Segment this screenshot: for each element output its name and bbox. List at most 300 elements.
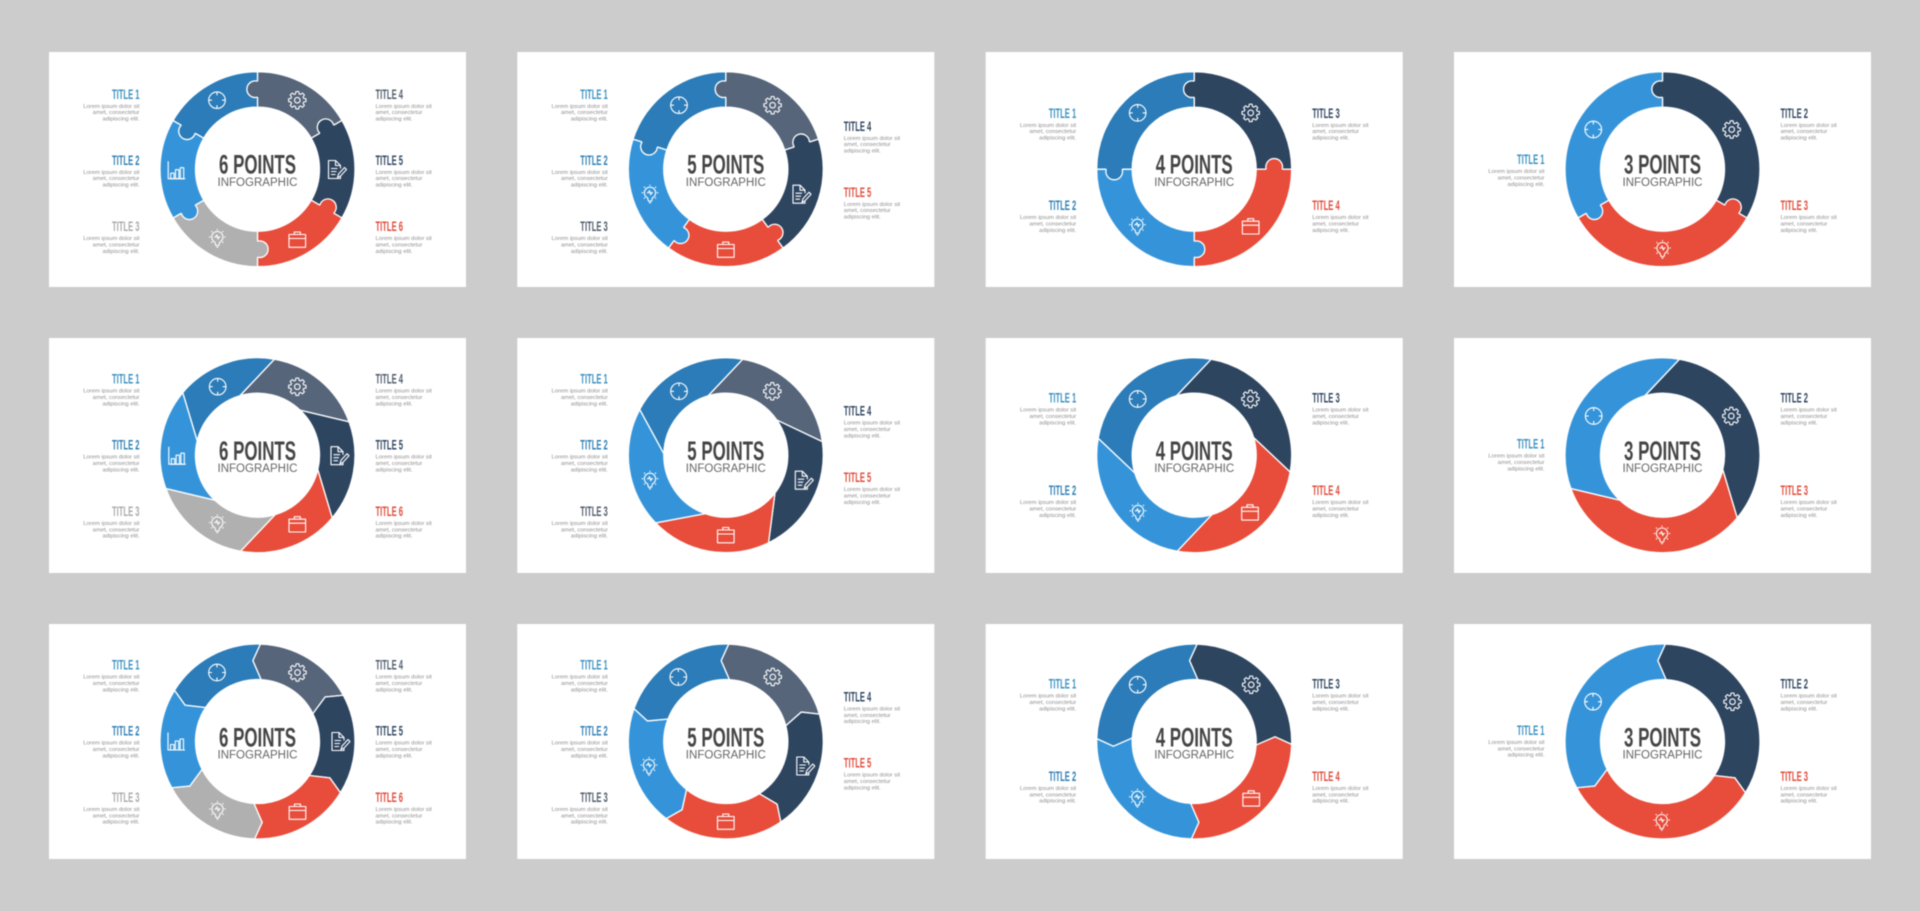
- icon: gear: [1723, 121, 1740, 138]
- label: title 5: adipiscing elit.: [844, 214, 881, 220]
- label: title 1: TITLE 1: [580, 372, 608, 387]
- label: title 5: Lorem ipsum dolor sit: [844, 487, 900, 493]
- panel background: [1454, 624, 1871, 859]
- label: title 4: adipiscing elit.: [1312, 228, 1350, 234]
- label: title 4: Lorem ipsum dolor sit: [844, 136, 900, 142]
- icon: crosshair: [671, 383, 687, 400]
- center subheading: INFOGRAPHIC: [1154, 177, 1234, 189]
- label: title 1: adipiscing elit.: [571, 116, 608, 122]
- label: title 6: Lorem ipsum dolor sit: [376, 807, 432, 813]
- panel: 6 points slanted: [49, 328, 466, 583]
- label: title 3: Lorem ipsum dolor sit: [551, 236, 608, 242]
- segment: title 5: [744, 139, 847, 251]
- label: title 2: Lorem ipsum dolor sit: [1780, 123, 1837, 129]
- label: title 3: TITLE 3: [1312, 677, 1340, 692]
- segment: title 5: [278, 392, 386, 518]
- panel: 4 points chevron: [986, 624, 1403, 859]
- puzzle tab: title 1: [176, 124, 196, 143]
- segment: title 4: [726, 72, 819, 150]
- icon: crosshair: [1129, 105, 1146, 121]
- center subheading: INFOGRAPHIC: [1622, 463, 1702, 475]
- label: title 2: TITLE 2: [580, 438, 608, 453]
- label: title 5: adipiscing elit.: [376, 182, 413, 188]
- label: title 6: amet, consectetur: [376, 242, 422, 248]
- panel: 6 points puzzle: [49, 47, 466, 291]
- label: title 1: Lorem ipsum dolor sit: [1020, 408, 1077, 414]
- label: title 5: Lorem ipsum dolor sit: [844, 773, 900, 779]
- segment: title 1: [632, 622, 740, 741]
- puzzle tab: dark blue: [1106, 168, 1122, 180]
- center subheading: INFOGRAPHIC: [686, 177, 766, 189]
- icon: briefcase: [718, 242, 734, 257]
- label: title 2: amet, consectetur: [1029, 507, 1076, 513]
- label: title 3: Lorem ipsum dolor sit: [1312, 408, 1369, 414]
- label: title 3: adipiscing elit.: [1780, 228, 1818, 234]
- segment: title 1: [173, 47, 273, 154]
- icon: briefcase: [718, 814, 734, 829]
- label: title 2: [83, 153, 140, 188]
- label: title 2: TITLE 2: [112, 153, 140, 168]
- center subheading: INFOGRAPHIC: [1622, 750, 1702, 762]
- label: title 1: Lorem ipsum dolor sit: [83, 675, 140, 681]
- panel background: [986, 52, 1403, 287]
- label: title 2: [1780, 677, 1837, 712]
- label: title 1: Lorem ipsum dolor sit: [551, 104, 608, 110]
- segment: red: [659, 751, 787, 875]
- label: title 2: adipiscing elit.: [571, 753, 608, 759]
- label: title 4: Lorem ipsum dolor sit: [1312, 215, 1369, 221]
- icon: document: [328, 160, 346, 178]
- segment: title 6: [242, 185, 342, 291]
- label: title 2: TITLE 2: [1780, 391, 1808, 406]
- segment: title 2: [593, 130, 715, 248]
- center heading: 6 POINTS: [219, 722, 296, 752]
- label: title 1: amet, consectetur: [93, 395, 140, 401]
- label: title 1: [551, 658, 608, 693]
- label: title 2: adipiscing elit.: [1780, 420, 1818, 426]
- icon: light bulb: [641, 757, 657, 775]
- label: title 3: [551, 219, 608, 255]
- label: title 1: adipiscing elit.: [1039, 706, 1077, 712]
- label: title 2: Lorem ipsum dolor sit: [1780, 694, 1837, 700]
- center subheading: INFOGRAPHIC: [218, 463, 298, 475]
- label: title 2: TITLE 2: [1049, 198, 1076, 213]
- segment: title 2: [1658, 644, 1760, 793]
- label: title 1: [1488, 152, 1545, 188]
- label: title 1: [83, 658, 140, 693]
- label: title 3: adipiscing elit.: [571, 249, 608, 255]
- label: title 5: Lorem ipsum dolor sit: [376, 741, 432, 747]
- label: title 3: Lorem ipsum dolor sit: [551, 807, 608, 813]
- label: title 1: adipiscing elit.: [102, 116, 140, 122]
- center heading: 4 POINTS: [1156, 722, 1233, 752]
- puzzle tab: light blue: [673, 227, 692, 247]
- label: title 3: amet, consectetur: [93, 242, 140, 248]
- label: title 2: Lorem ipsum dolor sit: [83, 170, 140, 176]
- label: title 1: Lorem ipsum dolor sit: [1020, 694, 1077, 700]
- label: title 1: TITLE 1: [1517, 723, 1545, 738]
- panel: 3 points slanted: [1454, 338, 1871, 588]
- icon: crosshair: [671, 97, 687, 114]
- segmented slanted ring: [591, 334, 847, 590]
- label: title 3: amet, consectetur: [561, 527, 608, 533]
- segment: title 1: [1529, 60, 1705, 218]
- panel: 5 points chevron: [517, 622, 934, 875]
- label: title 3: Lorem ipsum dolor sit: [83, 236, 140, 242]
- label: title 6: amet, consectetur: [376, 813, 422, 819]
- segmented chevron ring: [593, 622, 847, 875]
- icon: light bulb: [209, 514, 226, 533]
- label: title 4: Lorem ipsum dolor sit: [844, 421, 900, 427]
- label: title 5: TITLE 5: [376, 438, 403, 453]
- label: title 4: [376, 372, 432, 407]
- label: title 2: [1780, 106, 1837, 142]
- label: title 3: TITLE 3: [112, 790, 140, 805]
- label: title 3: Lorem ipsum dolor sit: [1312, 123, 1369, 129]
- label: title 5: TITLE 5: [844, 756, 872, 771]
- label: title 5: TITLE 5: [844, 470, 872, 485]
- segment: title 4: [721, 644, 819, 726]
- label: title 5: amet, consectetur: [844, 208, 891, 214]
- puzzle tab: red: [1266, 159, 1282, 170]
- segmented chevron ring: [1529, 631, 1760, 875]
- label: title 3: Lorem ipsum dolor sit: [1780, 215, 1837, 221]
- label: title 1: [1020, 106, 1077, 142]
- puzzle tab: light blue: [1586, 204, 1606, 223]
- label: title 4: TITLE 4: [1312, 769, 1340, 784]
- label: title 3: [1312, 391, 1369, 426]
- segmented puzzle ring: [131, 47, 384, 291]
- label: title 3: [83, 219, 140, 255]
- icon: light bulb: [1130, 503, 1146, 521]
- label: title 1: amet, consectetur: [1029, 414, 1076, 420]
- label: title 6: TITLE 6: [376, 504, 403, 519]
- label: title 1: [1020, 677, 1077, 712]
- segment: title 1: [1097, 644, 1198, 746]
- center subheading: INFOGRAPHIC: [1154, 463, 1234, 475]
- puzzle tab: title 4: [247, 81, 258, 98]
- label: title 6: adipiscing elit.: [376, 249, 413, 255]
- segmented puzzle ring: [1097, 72, 1292, 267]
- icon: gear: [289, 378, 306, 395]
- label: title 3: amet, consectetur: [93, 813, 140, 819]
- segment: title 3: [1190, 644, 1292, 745]
- icon: crosshair: [209, 664, 225, 681]
- icon: briefcase: [289, 517, 306, 532]
- label: title 4: Lorem ipsum dolor sit: [1312, 786, 1369, 792]
- center subheading: INFOGRAPHIC: [1622, 177, 1702, 189]
- label: title 4: amet, consectetur: [844, 142, 891, 148]
- icon: briefcase: [289, 232, 306, 247]
- label: title 5: [844, 185, 900, 220]
- segment: red: [662, 185, 783, 303]
- label: title 4: adipiscing elit.: [844, 148, 881, 154]
- panel: 3 points chevron: [1454, 624, 1871, 875]
- puzzle tab: title 5: [314, 116, 334, 134]
- icon: gear: [764, 383, 781, 400]
- label: title 2: Lorem ipsum dolor sit: [551, 455, 608, 461]
- label: title 3: TITLE 3: [580, 504, 608, 519]
- segment: title 1: [1097, 72, 1194, 169]
- label: title 4: adipiscing elit.: [1312, 513, 1350, 519]
- label: title 1: amet, consectetur: [1498, 746, 1545, 752]
- segmented puzzle ring: [593, 51, 847, 303]
- label: title 2: TITLE 2: [580, 724, 608, 739]
- label: title 3: TITLE 3: [112, 504, 140, 519]
- icon: gear: [1724, 693, 1741, 710]
- label: title 3: Lorem ipsum dolor sit: [1780, 786, 1837, 792]
- panel: 3 points puzzle: [1454, 52, 1871, 302]
- label: title 2: adipiscing elit.: [1039, 228, 1077, 234]
- label: title 5: adipiscing elit.: [844, 785, 881, 791]
- label: title 2: adipiscing elit.: [571, 182, 608, 188]
- label: title 2: TITLE 2: [1780, 106, 1808, 121]
- label: title 5: Lorem ipsum dolor sit: [376, 455, 432, 461]
- label: title 5: Lorem ipsum dolor sit: [844, 202, 900, 208]
- label: title 2: [1020, 769, 1077, 805]
- segment: title 5: [733, 409, 847, 543]
- icon: briefcase: [1242, 219, 1259, 234]
- label: title 3: TITLE 3: [1780, 769, 1808, 784]
- label: title 1: [551, 372, 608, 407]
- icon: briefcase: [718, 528, 734, 543]
- label: title 5: [844, 470, 900, 506]
- label: title 4: [376, 87, 432, 122]
- label: title 4: [1312, 198, 1369, 234]
- segment: title 3: [1572, 145, 1747, 302]
- label: title 4: Lorem ipsum dolor sit: [1312, 500, 1369, 506]
- segment: title 2: [1097, 738, 1199, 839]
- puzzle tab: navy: [1184, 81, 1195, 98]
- puzzle tab: slate: [715, 81, 727, 98]
- icon: crosshair: [209, 378, 226, 395]
- label: title 1: Lorem ipsum dolor sit: [1488, 740, 1545, 746]
- icon: light bulb: [1653, 812, 1670, 830]
- label: title 1: [1488, 437, 1545, 472]
- panel background: [517, 52, 934, 287]
- label: title 5: adipiscing elit.: [376, 753, 413, 759]
- label: title 1: Lorem ipsum dolor sit: [551, 675, 608, 681]
- center heading: 3 POINTS: [1624, 722, 1701, 752]
- center heading: 4 POINTS: [1156, 150, 1233, 180]
- icon: light bulb: [1654, 526, 1670, 544]
- label: title 2: Lorem ipsum dolor sit: [1020, 500, 1077, 506]
- label: title 4: Lorem ipsum dolor sit: [376, 389, 432, 395]
- segment: title 2: [129, 393, 237, 518]
- segment: title 1: [1098, 358, 1211, 473]
- label: title 4: amet, consectetur: [376, 110, 422, 116]
- label: title 1: [1488, 723, 1545, 759]
- label: title 3: amet, consectetur: [1312, 129, 1359, 135]
- segmented slanted ring: [129, 328, 386, 583]
- label: title 1: TITLE 1: [1517, 152, 1545, 167]
- label: title 4: adipiscing elit.: [376, 401, 413, 407]
- icon: crosshair: [209, 92, 225, 108]
- label: title 6: Lorem ipsum dolor sit: [376, 521, 432, 527]
- center subheading: INFOGRAPHIC: [686, 463, 766, 475]
- icon: gear: [289, 92, 306, 109]
- segment: title 5: [284, 120, 384, 227]
- label: title 5: amet, consectetur: [844, 494, 891, 500]
- puzzle tab: red: [1724, 196, 1744, 214]
- panel: 4 points slanted: [986, 338, 1403, 573]
- icon: gear: [289, 664, 306, 681]
- panel background: [1454, 52, 1871, 287]
- label: title 2: adipiscing elit.: [1039, 513, 1077, 519]
- label: title 3: amet, consectetur: [93, 527, 140, 533]
- label: title 3: Lorem ipsum dolor sit: [1780, 500, 1837, 506]
- label: title 4: TITLE 4: [844, 404, 872, 419]
- icon: light bulb: [209, 229, 226, 247]
- label: title 4: TITLE 4: [1312, 483, 1340, 498]
- segmented slanted ring: [1097, 358, 1292, 553]
- label: title 1: adipiscing elit.: [1507, 753, 1545, 759]
- label: title 3: TITLE 3: [1312, 106, 1340, 121]
- icon: document: [793, 185, 811, 203]
- label: title 5: [844, 756, 900, 791]
- label: title 2: amet, consectetur: [561, 176, 608, 182]
- label: title 1: [83, 372, 140, 407]
- label: title 3: adipiscing elit.: [571, 534, 608, 540]
- label: title 4: adipiscing elit.: [1312, 799, 1350, 805]
- center subheading: INFOGRAPHIC: [218, 177, 298, 189]
- label: title 4: TITLE 4: [376, 372, 403, 387]
- label: title 4: Lorem ipsum dolor sit: [376, 675, 432, 681]
- label: title 2: adipiscing elit.: [102, 753, 140, 759]
- label: title 4: [844, 690, 900, 725]
- panel: 6 points chevron: [49, 618, 466, 865]
- center heading: 5 POINTS: [687, 150, 764, 180]
- segment: title 6: [241, 457, 349, 583]
- label: title 3: adipiscing elit.: [571, 820, 608, 826]
- label: title 5: TITLE 5: [844, 185, 872, 200]
- center heading: 5 POINTS: [687, 436, 764, 466]
- label: title 3: adipiscing elit.: [1780, 513, 1818, 519]
- puzzle tab: navy: [1652, 81, 1664, 98]
- label: title 3: [1780, 198, 1837, 234]
- label: title 1: TITLE 1: [580, 658, 608, 673]
- label: title 1: amet, consectetur: [93, 681, 140, 687]
- puzzle tab: red: [767, 221, 786, 241]
- label: title 4: TITLE 4: [844, 690, 872, 704]
- label: title 6: adipiscing elit.: [376, 820, 413, 826]
- label: title 2: Lorem ipsum dolor sit: [551, 170, 608, 176]
- icon: crosshair: [1585, 693, 1601, 710]
- label: title 2: TITLE 2: [580, 153, 608, 168]
- puzzle tab: light blue: [1193, 241, 1205, 258]
- icon: bar chart: [169, 447, 186, 464]
- icon: light bulb: [1129, 217, 1146, 235]
- icon: gear: [764, 97, 781, 114]
- label: title 3: [1780, 483, 1837, 519]
- label: title 1: TITLE 1: [580, 87, 608, 102]
- segment: title 1: [171, 618, 276, 732]
- segment: title 1: [1531, 339, 1726, 518]
- label: title 5: [376, 724, 432, 759]
- label: title 3: amet, consectetur: [1780, 221, 1827, 227]
- icon: gear: [1243, 676, 1260, 693]
- label: title 3: [83, 504, 140, 540]
- icon: briefcase: [1243, 791, 1260, 806]
- label: title 1: [551, 87, 608, 122]
- label: title 2: [551, 438, 608, 473]
- label: title 4: [1312, 483, 1369, 519]
- label: title 3: Lorem ipsum dolor sit: [1312, 694, 1369, 700]
- label: title 4: adipiscing elit.: [844, 433, 881, 439]
- label: title 4: [376, 658, 432, 693]
- label: title 6: TITLE 6: [376, 219, 403, 234]
- segment: title 1: [1529, 631, 1709, 794]
- label: title 2: [1020, 198, 1077, 234]
- panel background: [49, 338, 466, 573]
- label: title 6: [376, 790, 432, 826]
- label: title 6: [376, 219, 432, 255]
- puzzle tab: title 6: [319, 196, 339, 214]
- puzzle tab: dark blue: [639, 141, 658, 157]
- label: title 4: TITLE 4: [1312, 198, 1340, 213]
- icon: bar chart: [168, 732, 185, 750]
- label: title 5: Lorem ipsum dolor sit: [376, 170, 432, 176]
- label: title 1: amet, consectetur: [1029, 129, 1076, 135]
- label: title 2: amet, consectetur: [561, 747, 608, 753]
- icon: crosshair: [1129, 391, 1146, 407]
- label: title 1: adipiscing elit.: [102, 687, 140, 693]
- label: title 3: adipiscing elit.: [1312, 136, 1350, 142]
- label: title 3: Lorem ipsum dolor sit: [83, 521, 140, 527]
- icon: gear: [764, 668, 781, 686]
- segment: title 5: [739, 707, 847, 826]
- segment: title 1: [633, 51, 736, 163]
- center heading: 6 POINTS: [219, 150, 296, 180]
- icon: crosshair: [1129, 676, 1146, 693]
- icon: document: [795, 471, 813, 489]
- segmented chevron ring: [1097, 644, 1292, 839]
- label: title 1: TITLE 1: [1049, 391, 1076, 406]
- puzzle tab: navy: [791, 132, 810, 148]
- segment: title 3: [1569, 712, 1749, 875]
- label: title 6: Lorem ipsum dolor sit: [376, 236, 432, 242]
- label: title 2: [551, 724, 608, 759]
- label: title 6: [376, 504, 432, 540]
- panel background: [517, 624, 934, 859]
- icon: light bulb: [642, 185, 658, 203]
- label: title 3: Lorem ipsum dolor sit: [83, 807, 140, 813]
- label: title 4: TITLE 4: [376, 658, 403, 673]
- label: title 1: amet, consectetur: [1498, 175, 1545, 181]
- label: title 3: amet, consectetur: [1780, 792, 1827, 798]
- label: title 1: adipiscing elit.: [1507, 182, 1545, 188]
- segment: title 5: [279, 689, 385, 802]
- label: title 4: amet, consectetur: [376, 681, 422, 687]
- label: title 2: amet, consectetur: [93, 176, 140, 182]
- label: title 2: adipiscing elit.: [1039, 799, 1077, 805]
- icon: crosshair: [1585, 121, 1602, 138]
- label: title 4: [844, 119, 900, 154]
- icon: document: [797, 757, 815, 775]
- segment: red: [656, 456, 796, 590]
- label: title 1: adipiscing elit.: [571, 401, 608, 407]
- label: title 2: Lorem ipsum dolor sit: [1020, 786, 1077, 792]
- label: title 5: [376, 438, 432, 473]
- label: title 2: Lorem ipsum dolor sit: [83, 741, 140, 747]
- segment: title 3: [173, 200, 258, 267]
- label: title 4: amet, consectetur: [844, 713, 891, 719]
- label: title 4: TITLE 4: [376, 87, 403, 102]
- label: title 4: amet, consectetur: [1312, 507, 1359, 513]
- segmented puzzle ring: [1529, 60, 1760, 302]
- label: title 2: Lorem ipsum dolor sit: [83, 455, 140, 461]
- label: title 6: TITLE 6: [376, 790, 403, 805]
